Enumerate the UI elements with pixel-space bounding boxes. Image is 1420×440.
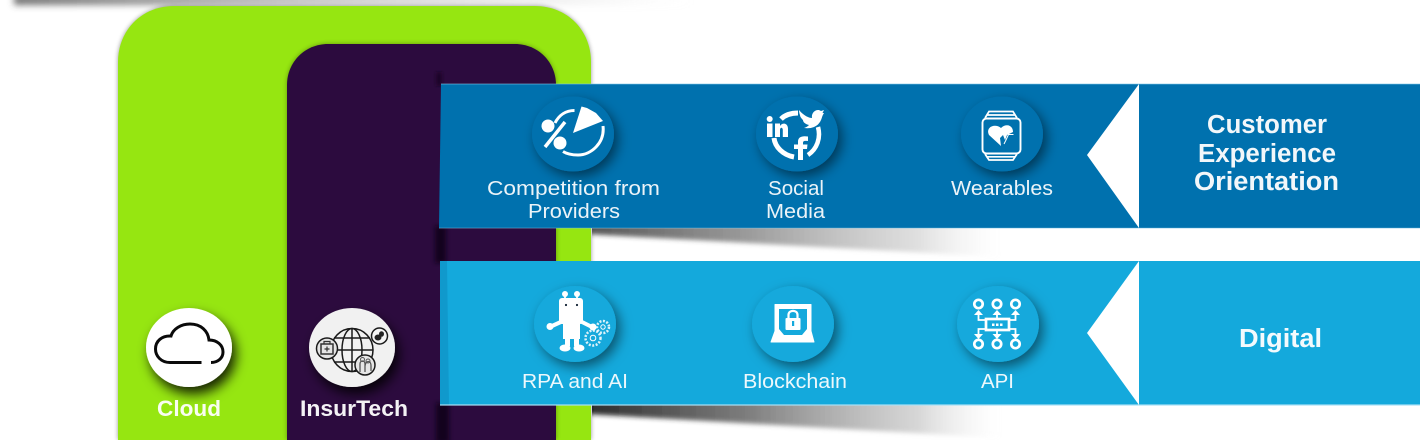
top edge shadow: [14, 0, 694, 5]
item: wearables: [951, 96, 1053, 200]
item: insurtech: [300, 308, 408, 421]
label: Cloud: [157, 396, 221, 421]
heading: customer experience orientation: Customer: [1207, 111, 1327, 139]
label: Blockchain: [743, 370, 847, 393]
item: competition from providers: Providers: [528, 200, 620, 223]
icon: globe with insurance badges: [309, 308, 395, 387]
panel: digital: [440, 261, 1420, 406]
item: rpa and ai: [522, 286, 628, 393]
label: Wearables: [951, 177, 1053, 200]
icon: api nodes: [957, 286, 1039, 362]
item: competition from providers: [487, 96, 660, 223]
label: RPA and AI: [522, 370, 628, 393]
band shadow on the dark panel: [435, 72, 449, 440]
shadow below digital band: [592, 406, 970, 436]
heading: digital: Digital: [1239, 325, 1322, 353]
icon: robot with gears: [534, 286, 616, 362]
shadow below customer experience band: [592, 228, 967, 254]
item: cloud: [146, 308, 232, 421]
item: social media: Media: [766, 200, 826, 223]
panel: customer experience orientation: [439, 84, 1420, 229]
heading: customer experience orientation: Orientation: [1194, 168, 1339, 196]
item: social media: [756, 96, 838, 223]
icon: smartwatch: [961, 96, 1043, 172]
label: API: [981, 370, 1014, 393]
label: Competition from: [487, 177, 660, 200]
arrow: digital: [1087, 261, 1139, 405]
label: InsurTech: [300, 396, 408, 421]
item: blockchain: [743, 286, 847, 393]
icon: social networks: [756, 96, 838, 172]
icon: percent and pie: [532, 96, 614, 172]
arrow: customer experience: [1087, 84, 1139, 228]
heading: customer experience orientation: [1194, 111, 1339, 196]
icon: cloud: [146, 308, 232, 387]
label: Social: [768, 177, 824, 200]
item: api: [957, 286, 1039, 393]
heading: customer experience orientation: Experience: [1198, 140, 1336, 168]
icon: laptop with lock: [752, 286, 834, 362]
panel: cloud: [118, 6, 591, 440]
panel: insurtech: [287, 44, 556, 440]
